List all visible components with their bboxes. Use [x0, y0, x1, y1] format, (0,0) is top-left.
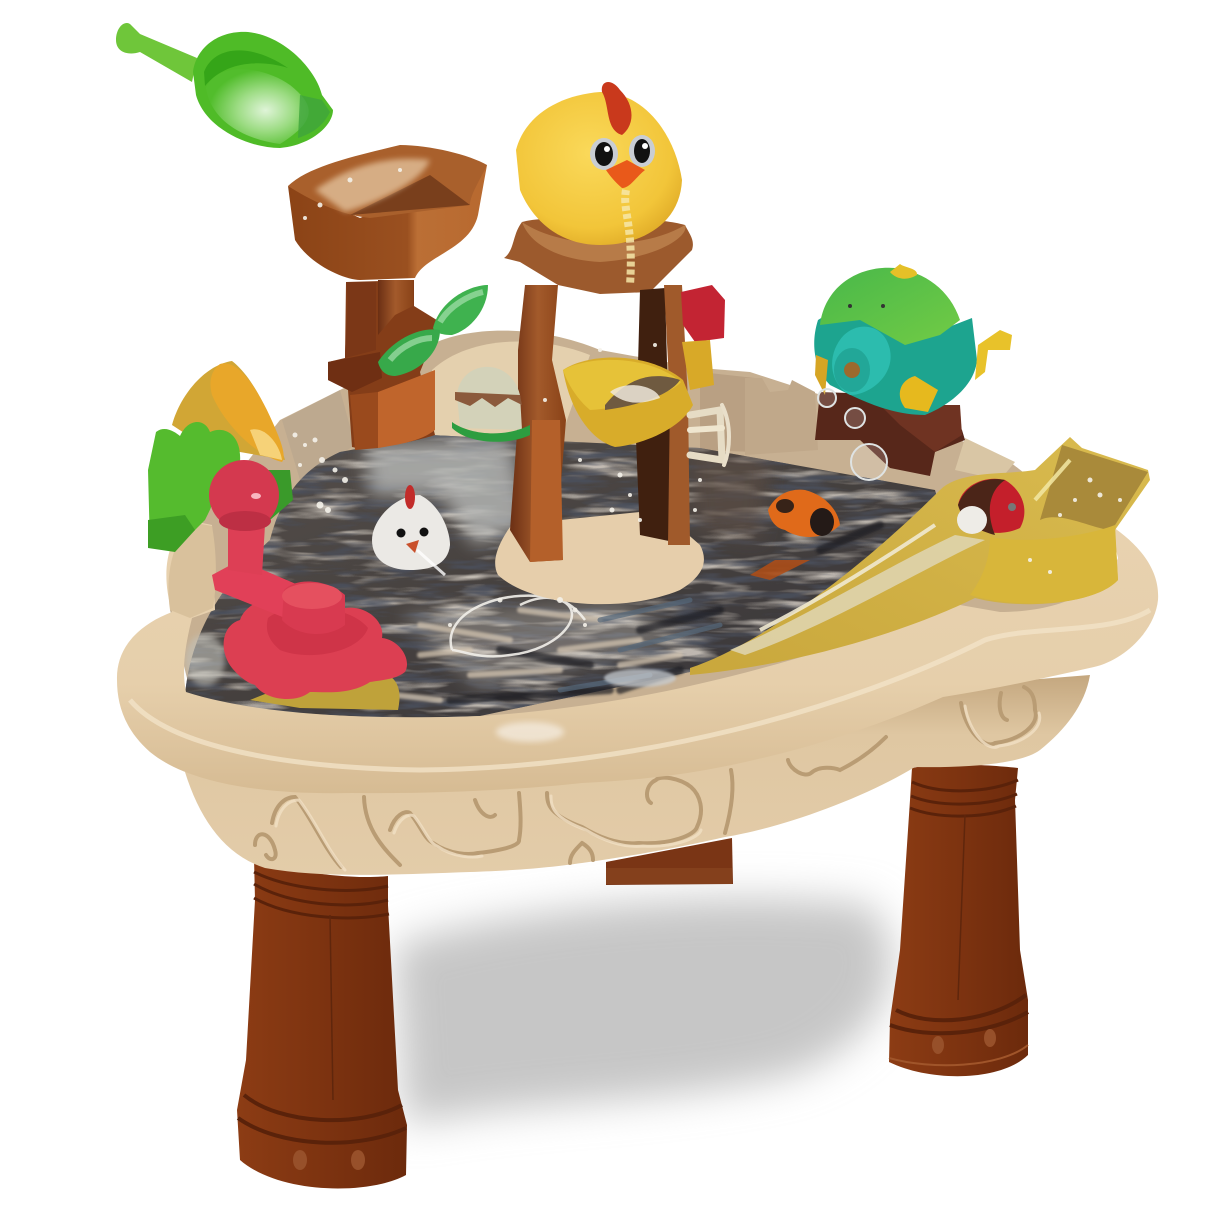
yellow marble slide: [690, 437, 1150, 675]
green frog: [148, 422, 293, 552]
front left table leg: [237, 858, 407, 1189]
back table leg: [606, 838, 733, 885]
carved basin underside: [185, 675, 1090, 875]
green dinosaur bubble machine: [814, 264, 1012, 415]
basin back wall: [170, 331, 1120, 740]
red wheel and yellow paddle behind tower: [681, 285, 725, 390]
water surface: [184, 435, 936, 718]
inner wall highlights: [282, 341, 1015, 480]
floor shadow: [395, 899, 892, 1125]
white hen toy: [372, 485, 450, 575]
yellow tower bucket: [563, 358, 693, 447]
water droplets: [292, 168, 1122, 627]
orange toy car: [750, 490, 840, 580]
ladybug toy: [957, 479, 1024, 535]
scoop: [116, 23, 333, 148]
brown funnel water tower: [288, 145, 487, 450]
red crank handle and flower wheel: [209, 460, 407, 710]
yellow tilted bowl: [172, 361, 285, 462]
front right table leg: [889, 765, 1028, 1076]
soap bubbles: [818, 389, 887, 480]
tower base: [495, 510, 704, 604]
hatching egg toy: [452, 367, 530, 442]
bubble machine stand: [815, 392, 965, 476]
table rim: [117, 520, 1158, 793]
tower legs: [510, 285, 690, 562]
green leaves: [378, 285, 488, 376]
tree stump platform: [504, 217, 693, 294]
small ladder: [690, 405, 729, 465]
yellow chicken sprinkler: [516, 82, 682, 285]
